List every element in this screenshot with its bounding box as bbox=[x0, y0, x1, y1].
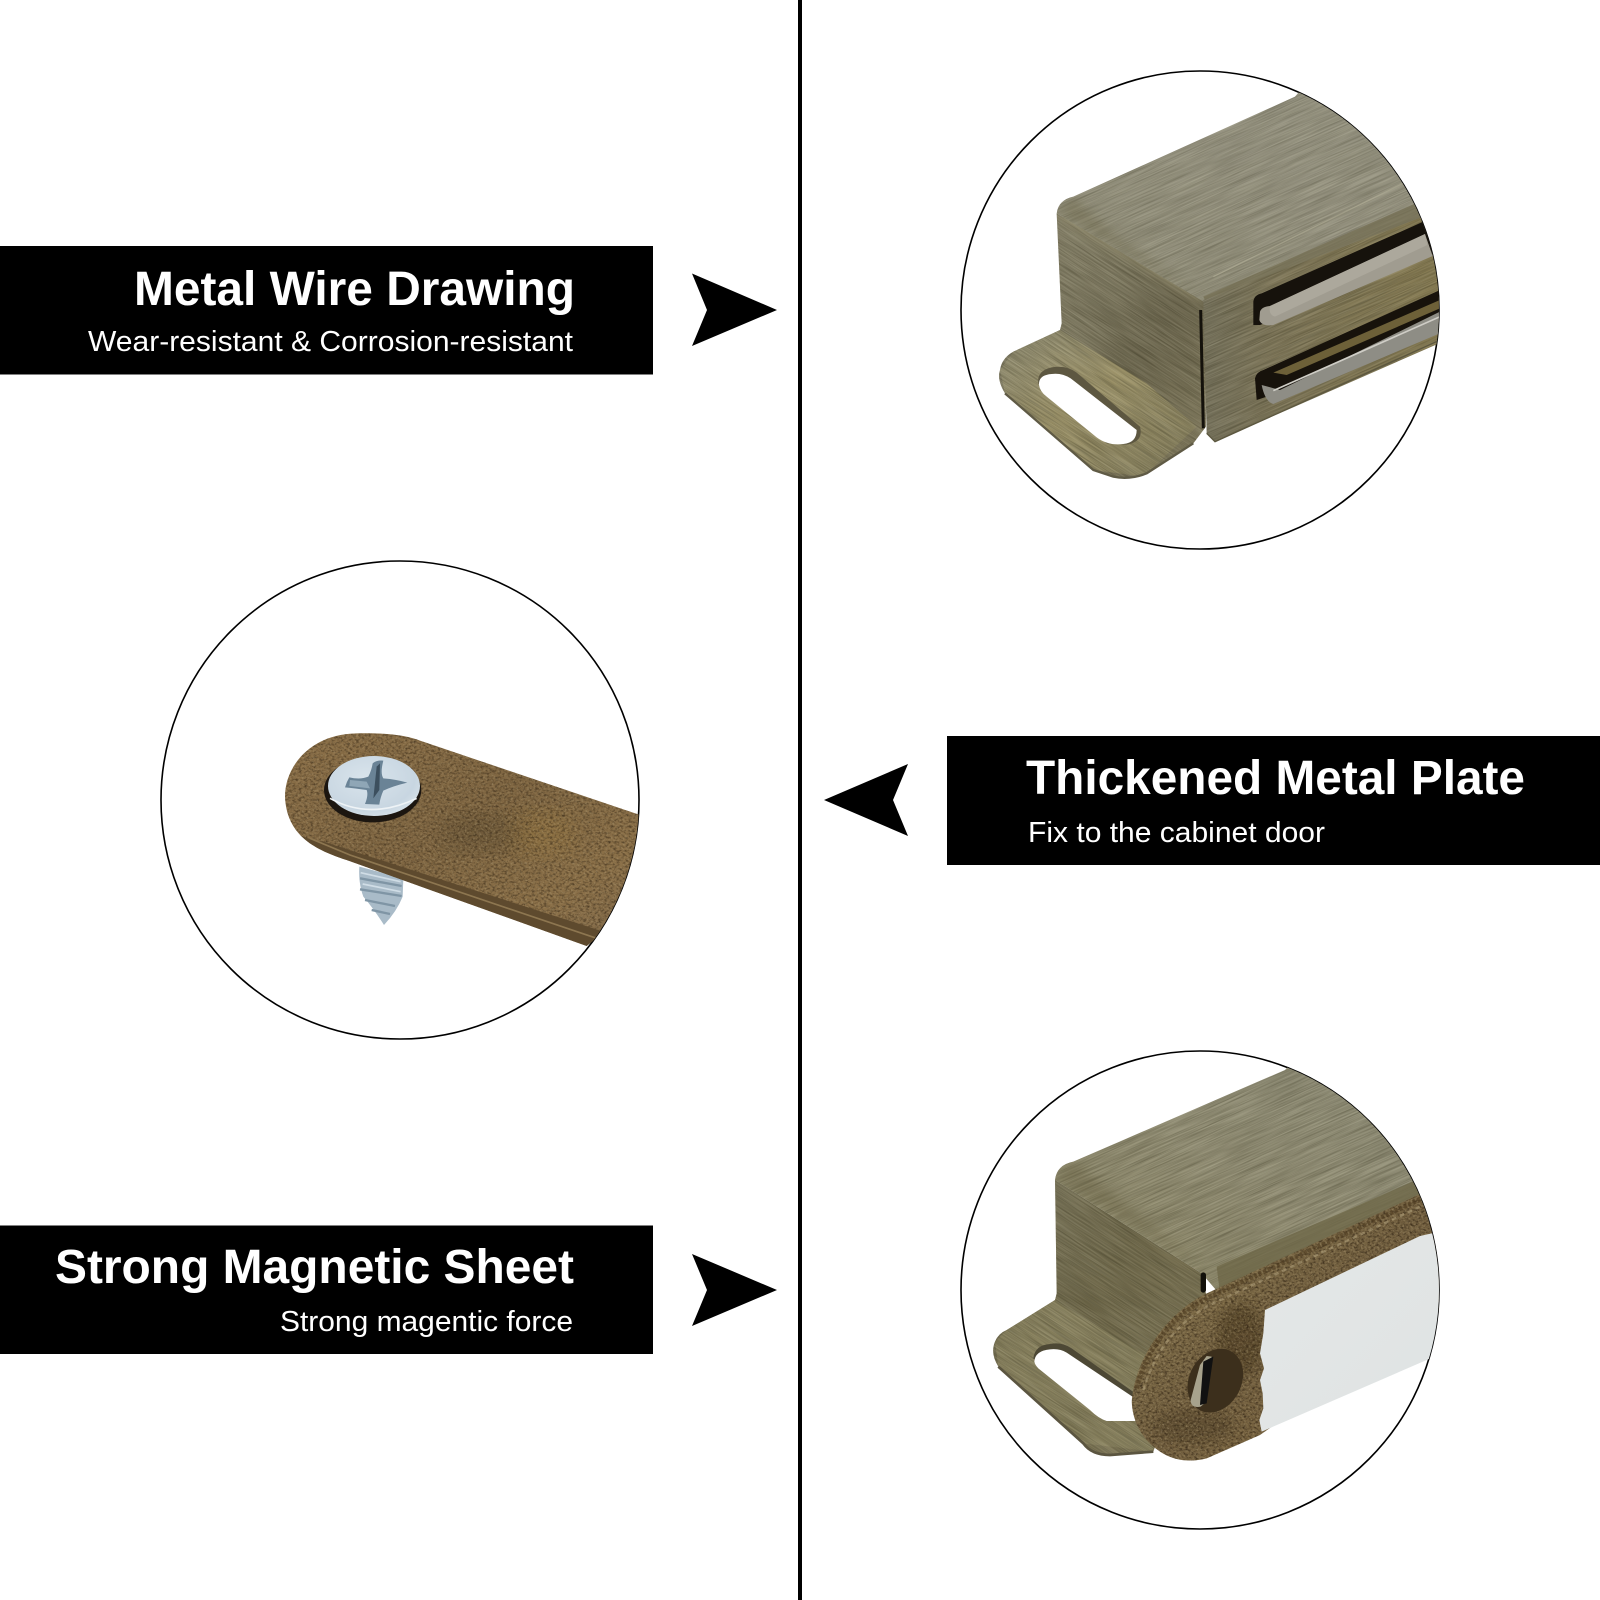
panel: thickened metal plate banner bbox=[947, 736, 1600, 865]
panel: strong magnetic sheet banner bbox=[0, 1226, 653, 1354]
upper slot bbox=[1253, 222, 1440, 325]
base plate bbox=[1127, 1190, 1447, 1467]
end face with slots bbox=[1204, 218, 1439, 441]
top face bbox=[1055, 1068, 1430, 1290]
arrow: pointing left to middle detail bbox=[824, 764, 908, 836]
subtext: wear and corrosion resistant: Wear-resistant & Corrosion-resistant bbox=[88, 326, 573, 358]
photo: catch underside bbox=[993, 1068, 1439, 1460]
top face bbox=[1056, 92, 1422, 302]
foot slot bbox=[1033, 1343, 1140, 1421]
seam bbox=[1200, 1272, 1206, 1293]
panel: metal wire drawing banner bbox=[0, 246, 653, 374]
panel: middle detail circle with plate and screw bbox=[161, 561, 650, 1039]
metal strip bbox=[285, 733, 638, 946]
screw head bbox=[324, 756, 421, 822]
white magnetic sheet bbox=[1259, 1230, 1447, 1432]
screw shaft bbox=[359, 867, 403, 925]
left face and foot bbox=[993, 1180, 1206, 1454]
plate hole bbox=[1188, 1348, 1243, 1412]
subtext: fix to the cabinet door: Fix to the cabinet door bbox=[1028, 817, 1325, 849]
panel: top detail circle with metal body bbox=[960, 70, 1440, 550]
photo: plate and screw bbox=[285, 733, 638, 946]
left face and mounting foot bbox=[999, 214, 1206, 477]
heading: strong magnetic sheet: Strong Magnetic Sheet bbox=[55, 1241, 574, 1294]
photo: brushed metal catch end bbox=[999, 92, 1439, 479]
panel: bottom detail circle with magnetic sheet bbox=[960, 1050, 1440, 1530]
lower slot bbox=[1255, 290, 1440, 400]
arrow: pointing right to bottom detail bbox=[692, 1254, 777, 1326]
arrow: pointing right to top detail bbox=[692, 274, 777, 346]
heading: thickened metal plate: Thickened Metal Plate bbox=[1026, 752, 1525, 805]
strip edge band bbox=[300, 834, 600, 946]
mounting slot bbox=[1038, 367, 1141, 445]
heading: metal wire drawing: Metal Wire Drawing bbox=[134, 263, 575, 316]
body seam bbox=[1201, 310, 1203, 428]
center divider line bbox=[798, 0, 802, 1600]
subtext: strong magnetic force: Strong magentic force bbox=[280, 1306, 573, 1338]
